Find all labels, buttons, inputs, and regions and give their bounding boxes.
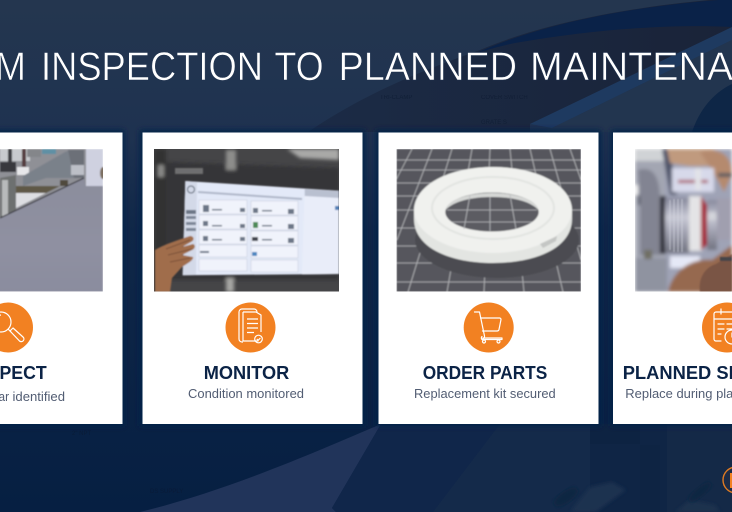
text: replacement kit secured: Replacement kit secured <box>414 386 556 401</box>
icon: shopping cart <box>464 302 514 352</box>
background drawing labels: TRI-CLAMP <box>380 95 412 101</box>
title: PLANNED <box>338 45 517 89</box>
background drawing labels: 2" NPT <box>72 431 91 437</box>
photo: white seal ring on cutting mat <box>396 149 581 292</box>
heading: monitor: MONITOR <box>204 362 289 383</box>
background drawing labels <box>72 95 528 495</box>
icon: document with check <box>226 302 276 352</box>
title: INSPECTION <box>41 45 263 89</box>
text: wear identified: identified <box>12 389 65 404</box>
logo <box>723 467 732 493</box>
title: TO <box>274 45 324 89</box>
icon: calendar with clock <box>702 302 732 352</box>
photo: hands replacing a seal <box>635 149 732 292</box>
background drawing labels: COVER SWITCH <box>481 95 528 101</box>
background drawing labels: GRATE S <box>481 120 507 126</box>
panel: inspect <box>0 130 124 426</box>
background drawing labels: DS SUPPLY <box>150 489 183 495</box>
photo: conveyor and machinery <box>0 149 106 292</box>
heading: inspect: PECT <box>0 362 47 383</box>
photo: touchscreen monitor <box>154 149 339 292</box>
panel: planned shutdown <box>611 130 732 426</box>
heading: order parts: ORDER PARTS <box>423 362 547 383</box>
text: condition monitored: Condition monitored <box>188 386 304 401</box>
panel: order parts <box>376 130 601 426</box>
panel: monitor <box>140 130 365 426</box>
icon: magnifying glass <box>0 302 33 352</box>
